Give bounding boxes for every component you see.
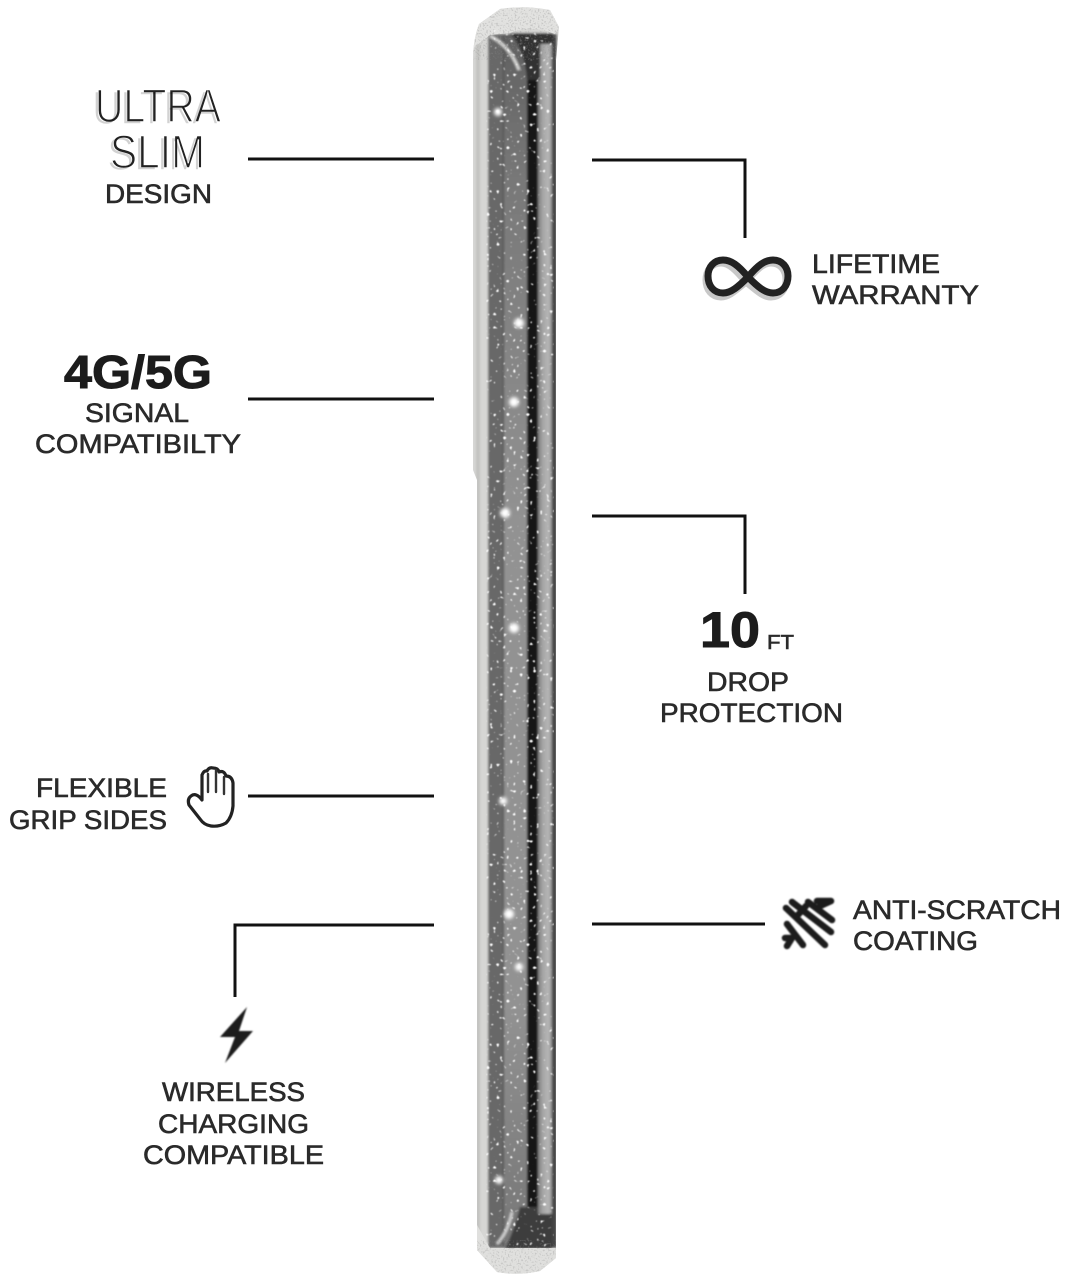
connector: signal	[248, 398, 434, 400]
label: wireless charging compatible: COMPATIBLE	[143, 1140, 324, 1170]
icon: scratch	[785, 901, 832, 946]
connector: grip	[248, 794, 434, 798]
label: lifetime warranty	[812, 249, 979, 310]
label: lifetime warranty: WARRANTY	[812, 280, 979, 310]
icon: lightning bolt	[220, 1007, 253, 1063]
connector: ultra slim	[248, 158, 434, 160]
label: wireless charging compatible: CHARGING	[158, 1109, 309, 1139]
connector: lifetime warranty	[592, 160, 745, 238]
label: 10ft drop protection: 10	[700, 602, 760, 658]
label: flexible grip sides: GRIP SIDES	[9, 805, 167, 835]
label: anti-scratch coating: COATING	[853, 926, 978, 956]
label: 10ft drop protection: FT	[767, 632, 794, 654]
frosted top cap	[473, 7, 559, 48]
label: ultra slim design	[92, 79, 222, 209]
label: ultra slim design: ULTRA	[95, 79, 222, 132]
label: 10ft drop protection: PROTECTION	[660, 698, 843, 728]
label: ultra slim design: SLIM	[107, 127, 202, 180]
label: 4G/5G signal compatibility: COMPATIBILTY	[35, 429, 241, 459]
label: 4G/5G signal compatibility: 4G/5G	[64, 346, 212, 398]
label: wireless charging compatible: WIRELESS	[162, 1077, 305, 1107]
label: 10ft drop protection: DROP	[707, 667, 789, 697]
label: 4G/5G signal compatibility: SIGNAL	[85, 398, 189, 428]
connector: anti-scratch	[592, 922, 765, 926]
icon: infinity	[706, 260, 788, 297]
label: ultra slim design: ULTRA	[92, 81, 219, 134]
connector: drop protection	[592, 516, 745, 594]
label: wireless charging compatible	[143, 1077, 324, 1170]
phone case side view	[473, 7, 559, 1274]
label: 4G/5G signal compatibility	[35, 346, 241, 459]
label: ultra slim design: SLIM	[110, 125, 205, 178]
label: ultra slim design: DESIGN	[105, 179, 212, 209]
label: flexible grip sides: FLEXIBLE	[36, 773, 167, 803]
label: flexible grip sides	[9, 773, 167, 835]
connector: wireless charging	[235, 925, 434, 997]
glitter speckle	[486, 30, 554, 1248]
frosted bottom cap	[477, 1225, 556, 1276]
label: 10ft drop protection	[660, 602, 843, 728]
glint stars	[494, 108, 524, 1184]
label: lifetime warranty: LIFETIME	[812, 249, 940, 279]
icon: hand	[188, 768, 233, 826]
label: anti-scratch coating	[853, 895, 1061, 956]
label: anti-scratch coating: ANTI-SCRATCH	[853, 895, 1061, 925]
